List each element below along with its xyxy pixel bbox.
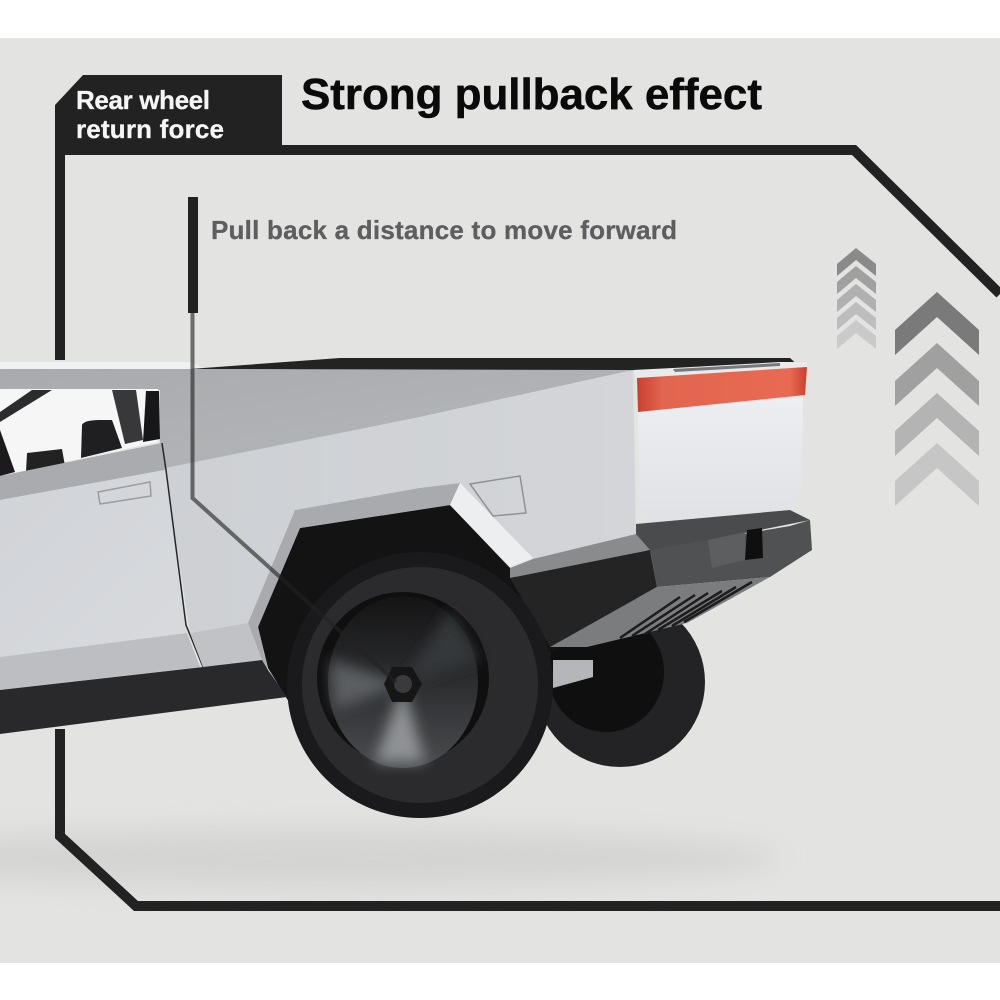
- black lower panel: [510, 550, 657, 647]
- far wheel: [535, 597, 705, 767]
- chevrons small: [837, 248, 876, 349]
- rear lower panel: [190, 623, 262, 667]
- chevrons large: [895, 292, 979, 506]
- window: [0, 389, 160, 476]
- leader line: [188, 197, 396, 682]
- door panel: [0, 470, 187, 657]
- hub highlights: [330, 610, 480, 762]
- suspension bracket: [553, 660, 593, 688]
- subtitle: Pull back a distance to move forward: [211, 215, 677, 245]
- wheel arch trim right: [450, 483, 533, 567]
- tech frame outline: [60, 150, 1000, 906]
- hex nut: [384, 667, 422, 702]
- wheel arch trim left: [248, 483, 460, 670]
- bumper: [510, 520, 812, 647]
- roof highlight: [0, 362, 205, 369]
- fuel door: [470, 476, 526, 516]
- truck bed top: [190, 358, 800, 371]
- heading tab: return force: [76, 114, 224, 144]
- tail light: [637, 367, 807, 412]
- heading tab: [55, 75, 282, 155]
- tab label: Rear wheel: [76, 85, 210, 115]
- near wheel: [287, 552, 553, 818]
- ground shadow: [0, 828, 780, 888]
- gray fascia: [650, 520, 812, 587]
- title: Strong pullback effect: [301, 70, 762, 119]
- underside: [550, 577, 770, 647]
- truck illustration: [0, 358, 812, 818]
- lower rear quarter: [165, 370, 636, 633]
- door upper panel: [0, 443, 165, 500]
- door seam: [162, 443, 203, 667]
- upper body panel: [0, 369, 633, 470]
- chrome strip: [510, 534, 650, 578]
- door handle: [98, 482, 151, 504]
- tow tab: [708, 532, 745, 568]
- arch interior: [258, 505, 560, 720]
- tail top strip: [633, 362, 807, 380]
- tailgate: [638, 397, 803, 524]
- door lower band: [0, 633, 200, 690]
- rocker sill: [0, 660, 287, 734]
- bumper gap: [636, 510, 810, 552]
